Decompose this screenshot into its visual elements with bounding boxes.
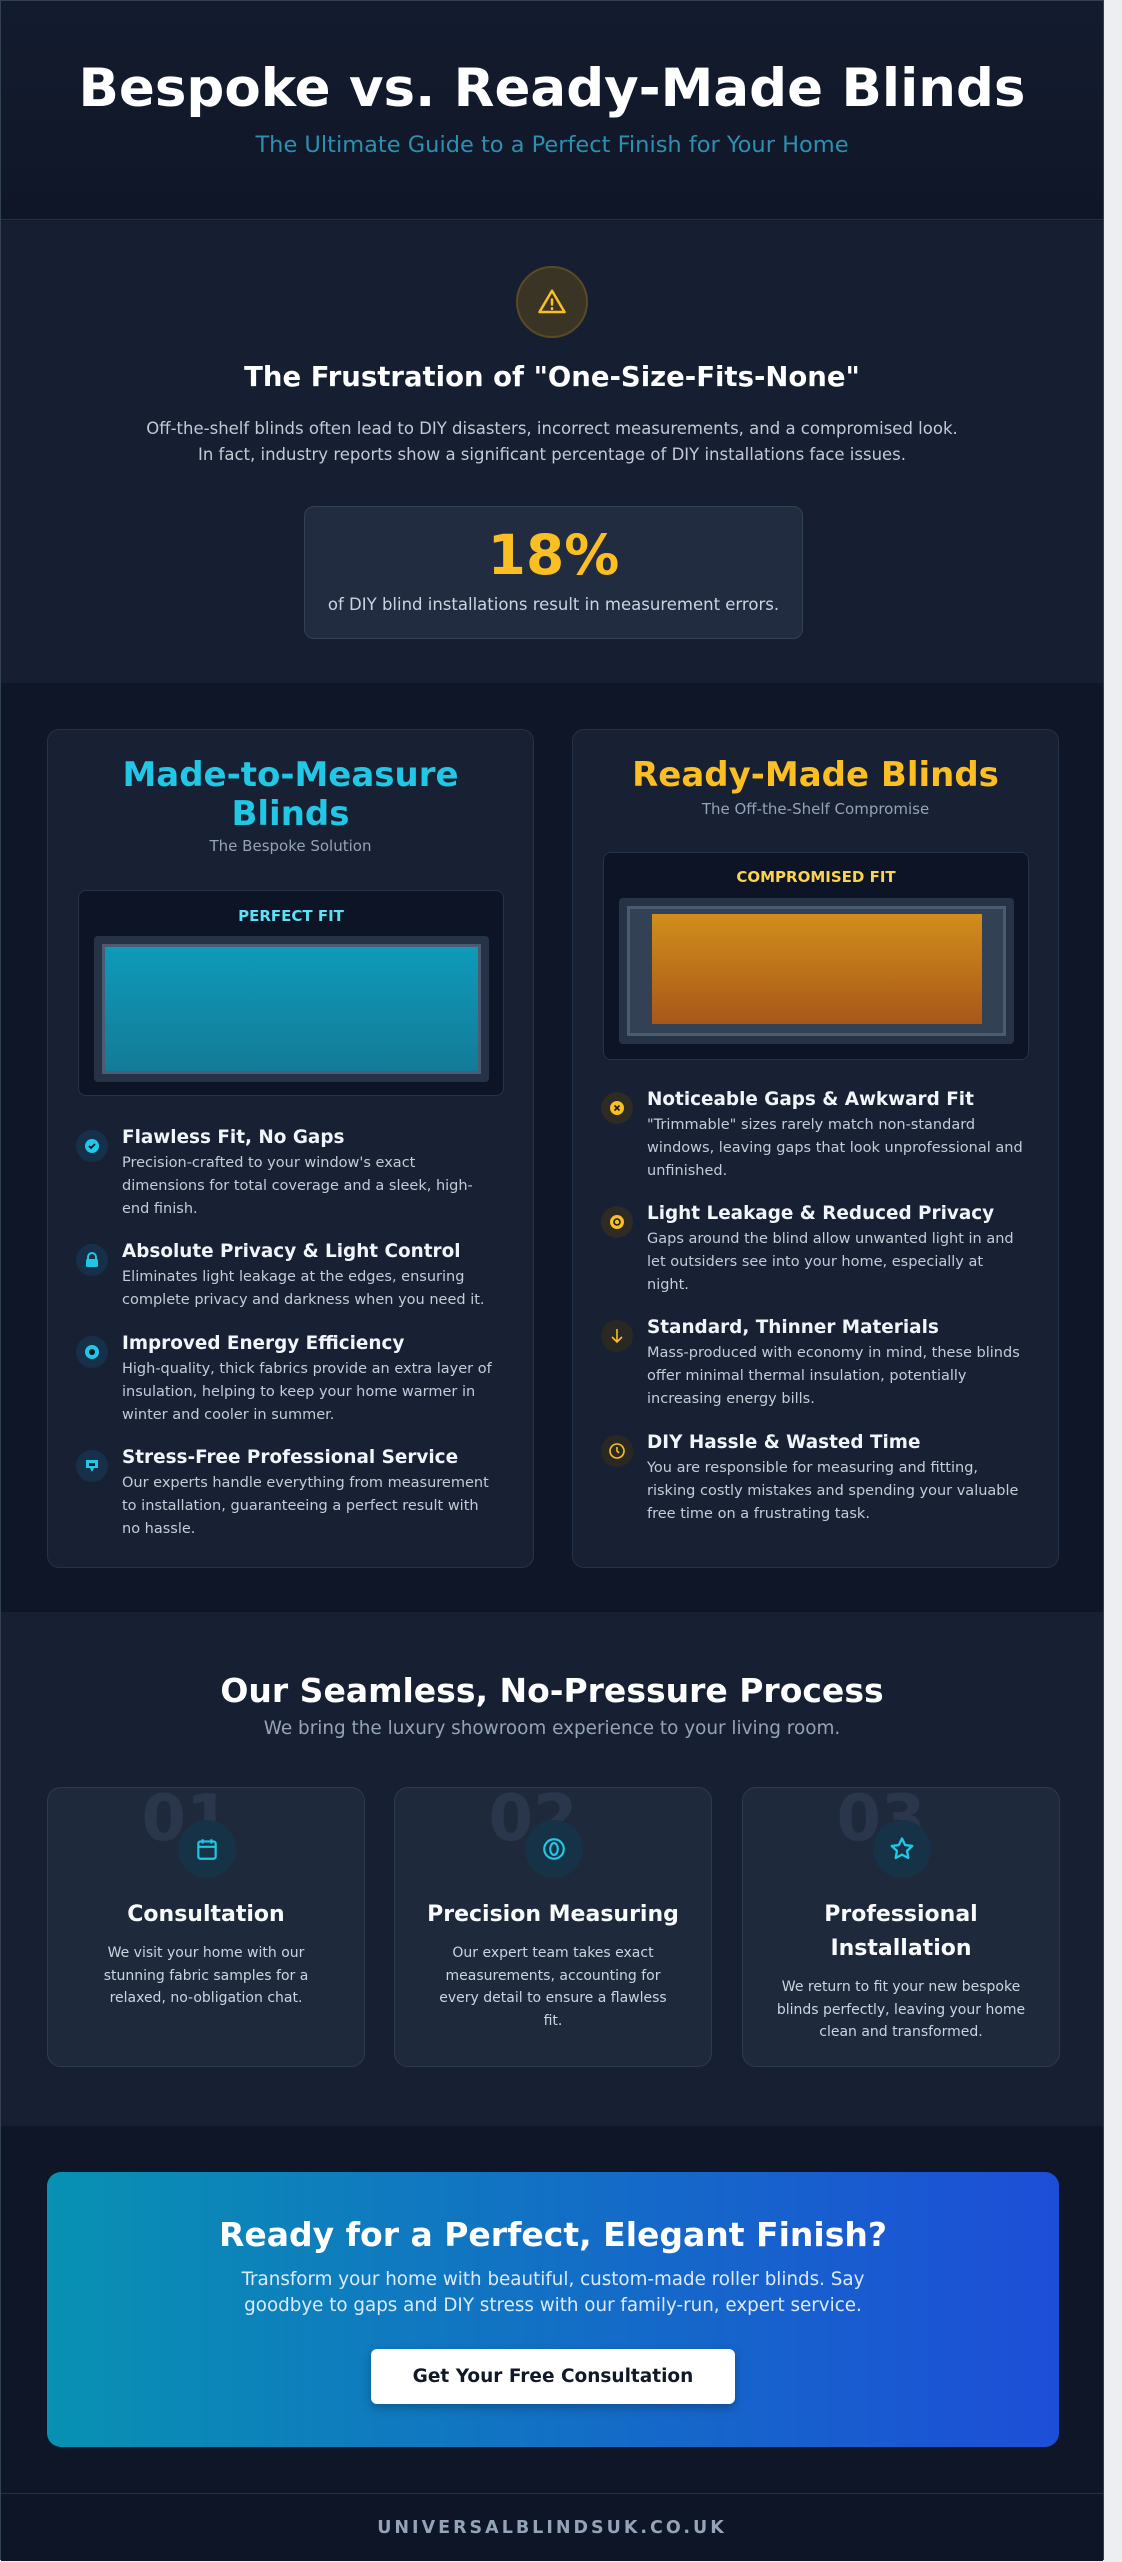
heading: The Frustration of "One-Size-Fits-None" <box>244 361 860 393</box>
cta text: Transform your home with beautiful, custom-made roller blinds. Say <box>242 2269 864 2290</box>
feature: service <box>76 1447 489 1537</box>
features list: Light Leakage & Reduced Privacy <box>647 1203 994 1224</box>
feature: flawless fit <box>76 1127 473 1217</box>
subtitle: The Bespoke Solution <box>210 837 371 855</box>
paragraph: In fact, industry reports show a significant percentage of DIY installations face issues. <box>198 445 906 464</box>
step 3 <box>742 1787 1060 2067</box>
panel: process <box>1 1612 1103 2126</box>
icon: star <box>873 1820 931 1878</box>
title: Blinds <box>231 794 350 834</box>
subtitle: The Ultimate Guide to a Perfect Finish for Your Home <box>255 132 849 158</box>
heading: Our Seamless, No-Pressure Process <box>220 1671 884 1710</box>
title: Made-to-Measure <box>122 755 459 795</box>
button: Get Your Free Consultation <box>413 2366 693 2387</box>
features list: Our experts handle everything from measurement to installation, guaranteeing a perfect result with no hassle. <box>122 1475 489 1537</box>
title: Ready-Made Blinds <box>632 755 999 795</box>
cta text: goodbye to gaps and DIY stress with our family-run, expert service. <box>244 2295 862 2316</box>
features list: DIY Hassle & Wasted Time <box>647 1432 920 1453</box>
features list: Improved Energy Efficiency <box>122 1333 404 1354</box>
features list: Precision-crafted to your window's exact dimensions for total coverage and a sleek, high-end finish. <box>122 1155 473 1217</box>
illustration: perfect fit <box>78 890 504 1096</box>
features list: "Trimmable" sizes rarely match non-standard windows, leaving gaps that look unprofessional and unfinished. <box>647 1117 1023 1179</box>
features list: Flawless Fit, No Gaps <box>122 1127 344 1148</box>
cta text <box>242 2269 864 2316</box>
paragraph: Off-the-shelf blinds often lead to DIY disasters, incorrect measurements, and a compromised look. <box>146 419 958 438</box>
paragraph <box>146 419 958 464</box>
step 2 <box>394 1787 712 2067</box>
features list: High-quality, thick fabrics provide an extra layer of insulation, helping to keep your home warmer in winter and cooler in summer. <box>122 1361 492 1423</box>
icon: measure <box>525 1820 583 1878</box>
features list: Gaps around the blind allow unwanted light in and let outsiders see into your home, especially at night. <box>647 1231 1014 1293</box>
step 3: Professional <box>824 1902 978 1927</box>
features list <box>76 1127 492 1537</box>
step 1: We visit your home with our stunning fabric samples for a relaxed, no-obligation chat. <box>104 1945 308 2006</box>
step 1: Consultation <box>127 1902 285 1927</box>
title <box>122 755 459 834</box>
panel: cta <box>47 2172 1059 2447</box>
card: ready-made <box>572 729 1059 1568</box>
features list: Eliminates light leakage at the edges, ensuring complete privacy and darkness when you need it. <box>122 1269 485 1308</box>
card: made-to-measure <box>47 729 534 1568</box>
features list: Absolute Privacy & Light Control <box>122 1241 461 1262</box>
feature: gaps <box>601 1089 1023 1179</box>
illustration: compromised fit <box>603 852 1029 1060</box>
icon: warning <box>516 266 588 338</box>
subtitle: The Off-the-Shelf Compromise <box>702 800 929 818</box>
button <box>371 2349 735 2404</box>
cta heading: Ready for a Perfect, Elegant Finish? <box>219 2215 887 2254</box>
stat box <box>304 506 803 639</box>
footer: UNIVERSALBLINDSUK.CO.UK <box>377 2518 727 2538</box>
icon: calendar <box>178 1820 236 1878</box>
illustration: perfect fit: PERFECT FIT <box>238 907 344 925</box>
step 3: We return to fit your new bespoke blinds perfectly, leaving your home clean and transformed. <box>777 1979 1025 2040</box>
features list: Stress-Free Professional Service <box>122 1447 458 1468</box>
features list <box>601 1089 1023 1522</box>
feature: privacy <box>76 1241 485 1308</box>
features list: You are responsible for measuring and fitting, risking costly mistakes and spending your valuable free time on a frustrating task. <box>647 1460 1018 1522</box>
features list: Standard, Thinner Materials <box>647 1317 939 1338</box>
title: Bespoke vs. Ready-Made Blinds <box>79 58 1025 119</box>
feature: materials <box>601 1317 1020 1407</box>
feature: light leakage <box>601 1203 1014 1293</box>
features list: Noticeable Gaps & Awkward Fit <box>647 1089 974 1110</box>
panel: frustration <box>1 221 1103 683</box>
header <box>1 1 1103 220</box>
stat box: of DIY blind installations result in measurement errors. <box>328 595 779 614</box>
step 1 <box>47 1787 365 2067</box>
footer <box>1 2493 1103 2561</box>
subheading: We bring the luxury showroom experience to your living room. <box>264 1718 840 1739</box>
step 3: Installation <box>830 1936 972 1961</box>
feature: energy <box>76 1333 492 1423</box>
illustration: compromised fit: COMPROMISED FIT <box>736 868 896 886</box>
feature: diy hassle <box>601 1432 1018 1522</box>
step 2: Precision Measuring <box>427 1902 679 1927</box>
features list: Mass-produced with economy in mind, these blinds offer minimal thermal insulation, potentially increasing energy bills. <box>647 1345 1020 1407</box>
stat box: 18% <box>488 523 619 587</box>
panel: comparison <box>1 683 1103 1612</box>
step 2: Our expert team takes exact measurements, accounting for every detail to ensure a flawless fit. <box>439 1945 667 2028</box>
